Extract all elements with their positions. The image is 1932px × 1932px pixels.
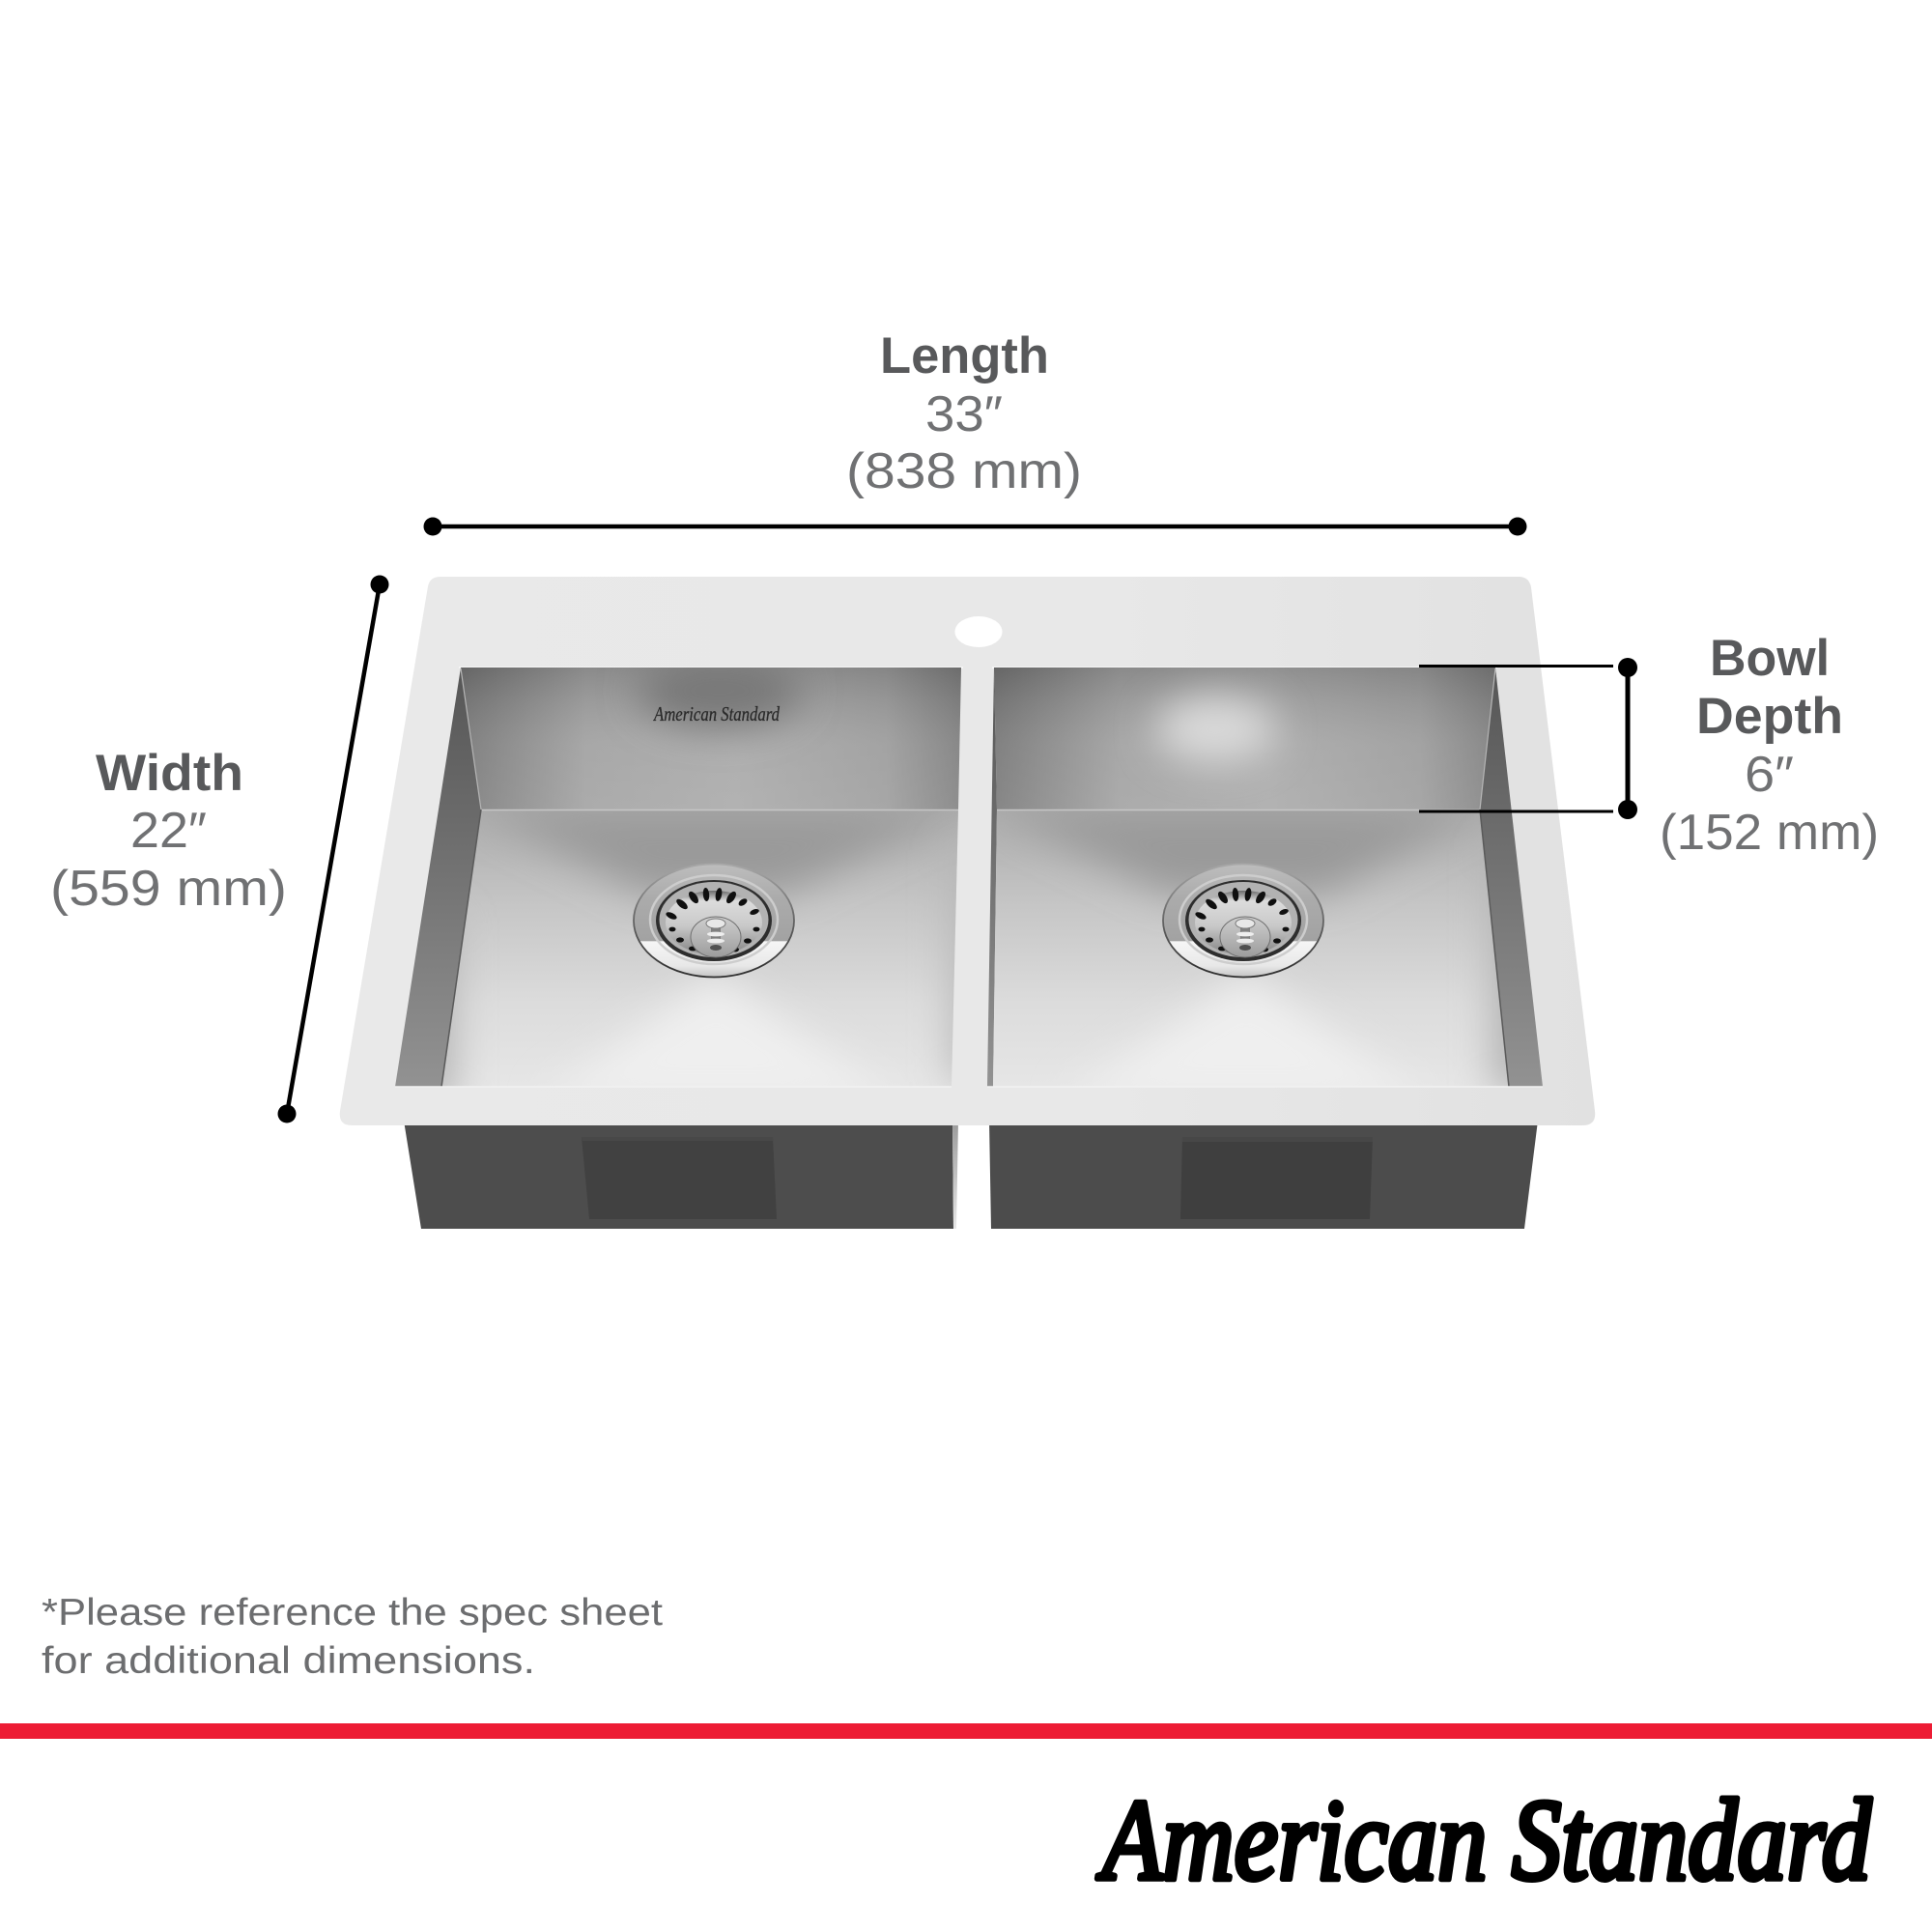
dimension label: length: 33″ — [925, 386, 1003, 442]
dimension label: width: 22″ — [130, 803, 207, 859]
dimension label: length — [846, 327, 1082, 499]
footnote: *Please reference the spec sheet — [42, 1592, 663, 1634]
right bowl left sliver wall — [987, 668, 997, 1087]
footnote: for additional dimensions. — [42, 1640, 535, 1682]
left bowl — [395, 667, 963, 1088]
faucet hole — [954, 616, 1003, 647]
dimension label: width: (559 mm) — [50, 861, 287, 917]
dimension label: length: Length — [880, 327, 1049, 384]
dimension label: bowl depth — [1660, 630, 1879, 861]
dimension arrow: bowl depth — [1419, 658, 1637, 819]
dimension label: width — [50, 745, 287, 917]
dimension label: length: (838 mm) — [846, 443, 1082, 499]
dimension label: bowl depth: Bowl — [1710, 630, 1830, 687]
right bowl right wall — [1480, 668, 1543, 1087]
left bowl back wall — [461, 654, 961, 810]
left drain strainer — [634, 864, 794, 978]
footnote — [42, 1592, 663, 1682]
dimension arrow: length — [423, 518, 1526, 535]
right bowl back wall — [994, 668, 1495, 810]
sink illustration — [340, 577, 1595, 1229]
left bowl floor — [442, 810, 958, 1086]
logo etched on left bowl: American Standard — [652, 702, 780, 725]
red divider bar — [0, 1723, 1932, 1739]
dimension label: bowl depth: (152 mm) — [1660, 805, 1879, 861]
dimension label: width: Width — [96, 745, 243, 802]
dimension label: bowl depth: Depth — [1696, 688, 1843, 745]
sink body: left bowl underside — [404, 1121, 958, 1229]
dimension arrow: width — [278, 576, 388, 1122]
sink deck plate — [340, 577, 1595, 1125]
right bowl floor — [993, 810, 1508, 1086]
right bowl — [985, 667, 1543, 1101]
dimension label: bowl depth: 6″ — [1745, 747, 1794, 803]
right drain strainer — [1163, 864, 1323, 978]
sink body: right bowl underside — [989, 1121, 1538, 1229]
left bowl side wall — [395, 668, 481, 1087]
